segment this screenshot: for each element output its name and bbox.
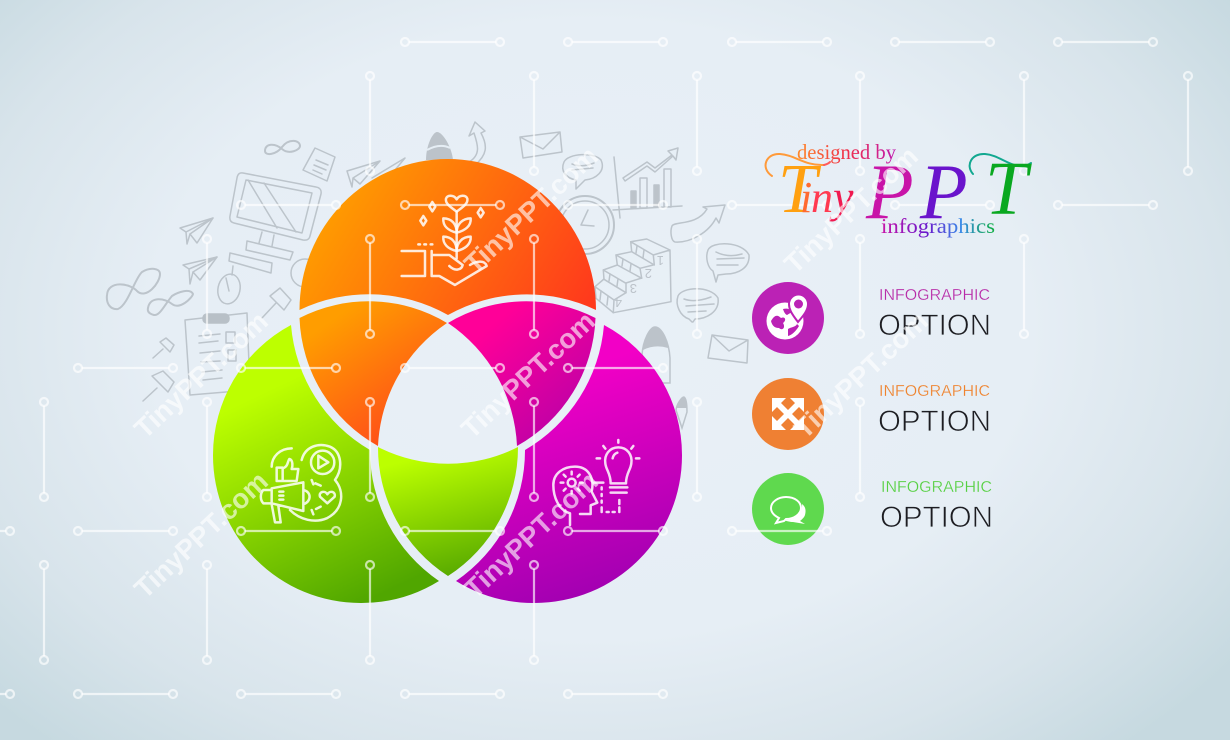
logo: designed by TinyPPT infographics (766, 140, 1032, 238)
watermarks (128, 140, 934, 604)
doodle: mouse (215, 266, 243, 306)
doodle: sticky note (303, 148, 335, 181)
doodle: numbered steps (595, 239, 671, 313)
doodle: paper planes (180, 218, 217, 284)
watermarks: TinyPPT.com (455, 305, 601, 444)
doodle: clipboard (185, 313, 250, 395)
logo: TinyPPT wordmark: y (829, 171, 854, 222)
icon: chat bubbles (771, 497, 806, 524)
doodle: top rocket (426, 132, 453, 160)
label: option: OPTION (878, 309, 991, 342)
icon: megaphone with likes (261, 445, 341, 522)
watermarks: TinyPPT.com (128, 465, 274, 604)
label: infographic green: INFOGRAPHIC (881, 479, 992, 496)
doodle: numbered steps: 4 (615, 295, 622, 310)
logo: TinyPPT wordmark: T (778, 151, 822, 228)
icon: hand holding plant (402, 196, 487, 285)
label: infographic orange: INFOGRAPHIC (879, 383, 990, 400)
doodle: numbered steps: 1 (657, 253, 664, 268)
doodle: swoosh arrow (671, 205, 725, 242)
logo: decorative swashes (766, 154, 1031, 176)
venn: magenta segment (456, 325, 682, 603)
venn: orange top segment (300, 159, 596, 315)
doodle: clock (556, 196, 614, 254)
doodle: push pins (143, 288, 291, 401)
venn: orange overlap lens (300, 301, 447, 446)
legend (752, 282, 993, 545)
doodle: infinity loops (107, 141, 300, 315)
logo: TinyPPT wordmark: T (985, 147, 1032, 231)
logo: TinyPPT wordmark: P (865, 148, 914, 235)
venn: green segment (213, 325, 439, 603)
logo: designed by: designed by (797, 140, 896, 164)
icon: expand arrows (772, 398, 804, 430)
doodle: envelope right (708, 335, 748, 363)
doodle: magnifier ring (291, 259, 319, 287)
background doodles (107, 122, 749, 428)
venn: green overlap lens (378, 447, 518, 576)
badge: orange circle (752, 378, 824, 450)
logo: TinyPPT wordmark: i (800, 173, 812, 222)
icon: globe with pin (766, 294, 808, 340)
legend row 2: orange (752, 378, 991, 450)
icon: head with gear and light bulb (553, 440, 639, 525)
label: option: OPTION (878, 405, 991, 438)
legend row 3: green (752, 473, 993, 545)
label: option: OPTION (880, 501, 993, 534)
doodle: numbered steps: 3 (630, 281, 637, 296)
doodle: growth chart (613, 148, 682, 218)
logo: TinyPPT wordmark: n (811, 173, 833, 222)
doodle: top planes and envelope (347, 158, 405, 187)
doodle: rockets right (642, 327, 687, 428)
watermarks: TinyPPT.com (778, 140, 924, 279)
venn: magenta overlap lens (448, 301, 596, 446)
venn diagram (213, 159, 682, 603)
doodle: speech bubble near clock (563, 155, 602, 189)
logo: TinyPPT wordmark: P (919, 148, 968, 235)
doodle: numbered steps: 2 (645, 266, 652, 281)
logo: infographics: infographics (881, 214, 995, 238)
label: infographic purple: INFOGRAPHIC (879, 287, 990, 304)
badge: purple circle (752, 282, 824, 354)
watermarks: TinyPPT.com (458, 140, 604, 279)
badge: green circle (752, 473, 824, 545)
watermarks: TinyPPT.com (128, 305, 274, 444)
doodle: curved arrow (469, 122, 485, 165)
watermarks: TinyPPT.com (458, 465, 604, 604)
doodle: monitor (229, 173, 321, 273)
doodle: speech bubbles right (677, 244, 749, 322)
watermarks: TinyPPT.com (788, 305, 934, 444)
doodle: envelope top (520, 132, 562, 158)
legend row 1: purple (752, 282, 991, 354)
